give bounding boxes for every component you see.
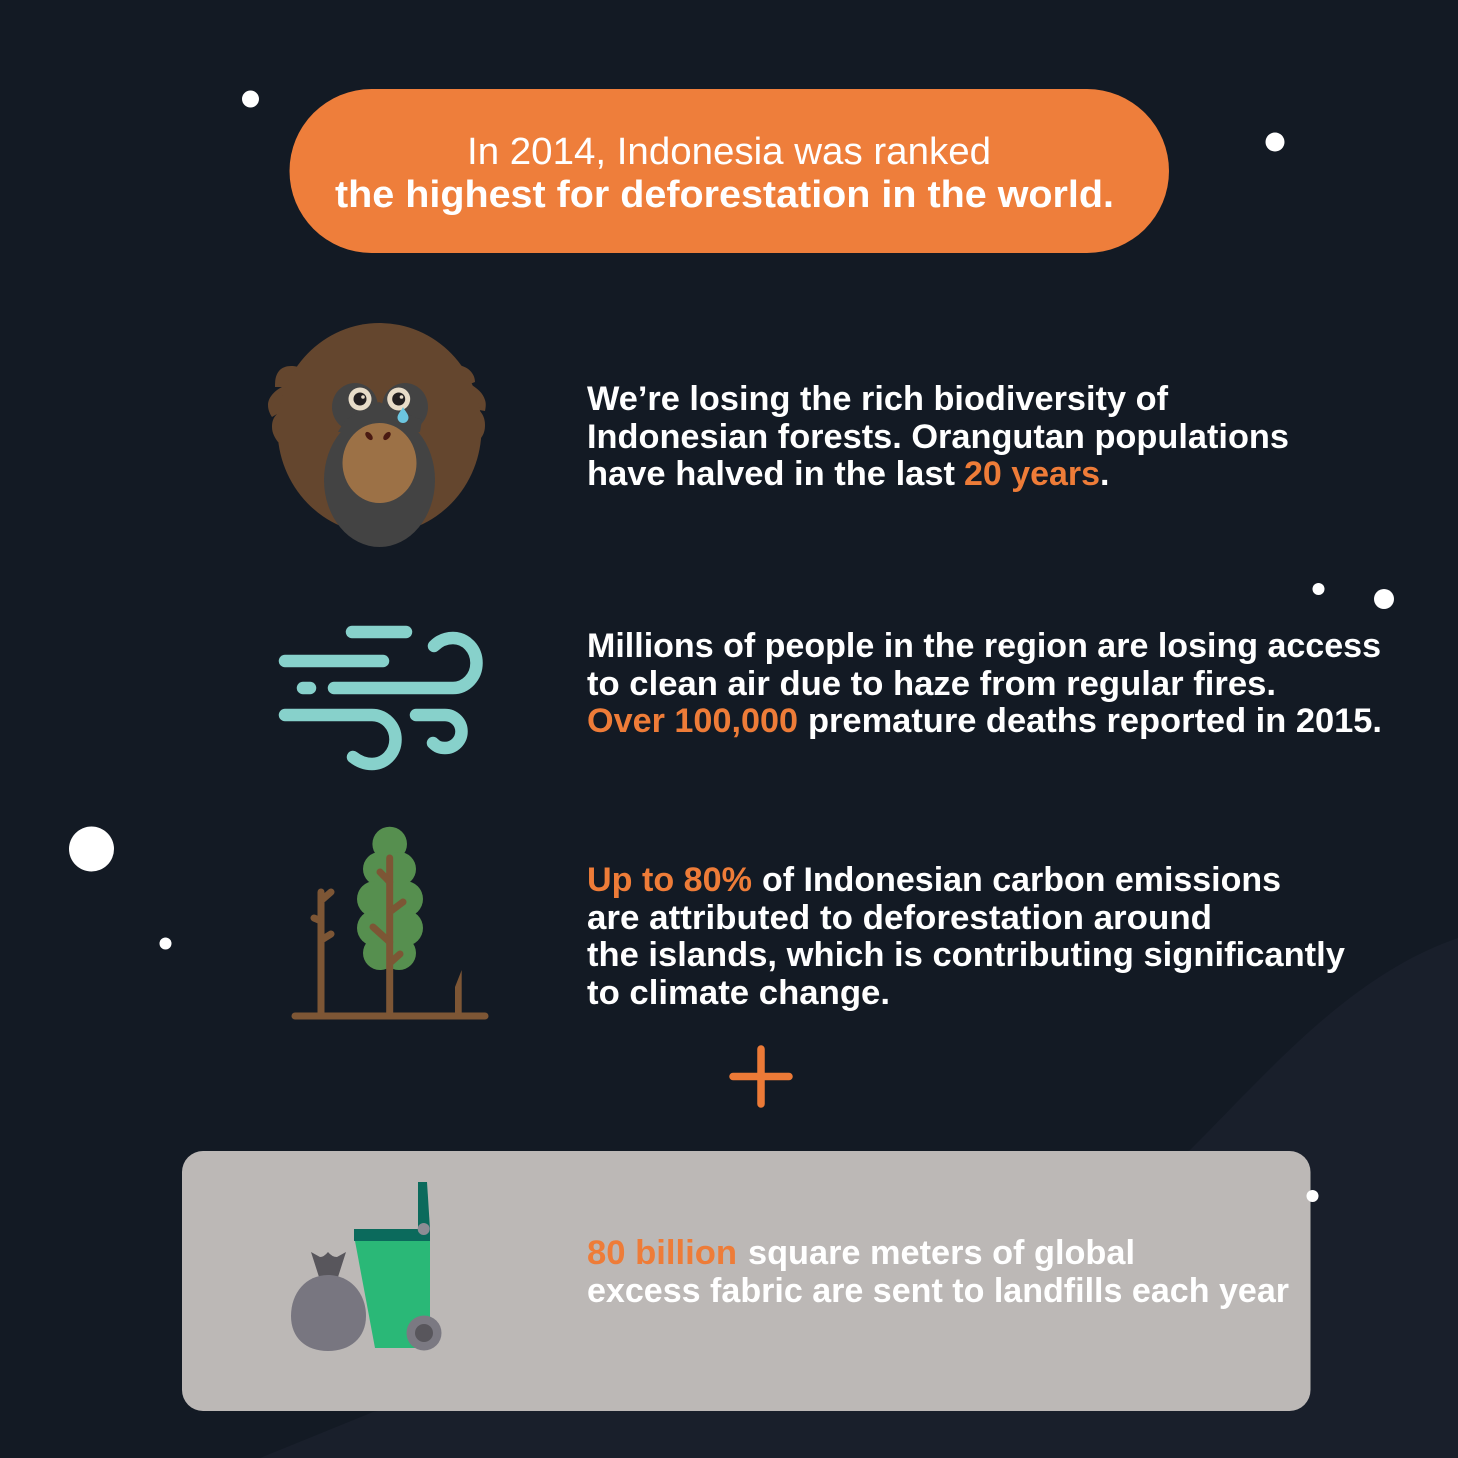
text: clean air: premature deaths reported in 2015. — [808, 702, 1382, 740]
panel: landfill fabric — [182, 1151, 1310, 1411]
text: biodiversity: Indonesian forests. Orangutan populations — [587, 418, 1289, 456]
title banner: In 2014, Indonesia was ranked — [467, 131, 991, 173]
text: excess fabric: 80 billion — [587, 1234, 737, 1272]
icon: trees — [295, 827, 485, 1016]
text: carbon emissions: to climate change. — [587, 974, 890, 1012]
icon: crying orangutan — [268, 323, 486, 547]
text: clean air: to clean air due to haze from regular fires. — [587, 665, 1276, 703]
text: biodiversity — [587, 380, 1289, 493]
decorative dot on panel corner — [1306, 1190, 1318, 1202]
icon: plus — [733, 1049, 789, 1104]
text: biodiversity: 20 years — [964, 455, 1100, 493]
text: carbon emissions: of Indonesian carbon emissions — [762, 861, 1281, 899]
text: excess fabric: excess fabric are sent to landfills each year — [587, 1272, 1289, 1310]
title banner: the highest for deforestation in the world. — [335, 174, 1114, 216]
text: excess fabric — [587, 1234, 1289, 1310]
text: carbon emissions: are attributed to deforestation around — [587, 899, 1212, 937]
text: carbon emissions: Up to 80% — [587, 861, 752, 899]
text: clean air: Over 100,000 — [587, 702, 798, 740]
icon: garbage bag and bin — [291, 1182, 442, 1351]
text: biodiversity: . — [1100, 455, 1109, 493]
text: clean air — [587, 627, 1382, 740]
text: biodiversity: We’re losing the rich biodiversity of — [587, 380, 1169, 418]
text: excess fabric: square meters of global — [748, 1234, 1135, 1272]
icon: wind — [285, 632, 476, 764]
text: clean air: Millions of people in the region are losing access — [587, 627, 1381, 665]
decorative dots — [69, 90, 1394, 950]
text: biodiversity: have halved in the last — [587, 455, 955, 493]
text: carbon emissions — [587, 861, 1345, 1012]
title banner — [290, 89, 1169, 253]
text: carbon emissions: the islands, which is contributing significantly — [587, 936, 1345, 974]
